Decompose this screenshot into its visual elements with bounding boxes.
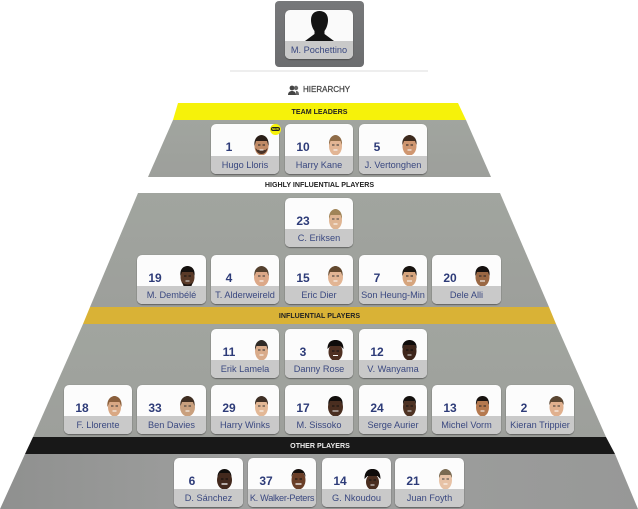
player: Hugo Lloris: Hugo Lloris bbox=[222, 160, 268, 170]
player: Ben Davies: Ben Davies bbox=[148, 420, 195, 430]
player: Danny Rose: Danny Rose bbox=[294, 364, 344, 374]
player: F. Llorente bbox=[64, 385, 132, 434]
player: Juan Foyth: 21 bbox=[406, 474, 420, 488]
player: M. Dembele: 19 bbox=[148, 271, 162, 285]
player: G. Nkoudou: 14 bbox=[333, 474, 347, 488]
player: Dele Alli: 20 bbox=[443, 271, 457, 285]
player: Ben Davies: 33 bbox=[148, 401, 162, 415]
player: Michel Vorm: Michel Vorm bbox=[441, 420, 492, 430]
player: M. Dembele bbox=[137, 255, 206, 304]
player: Serge Aurier: Serge Aurier bbox=[367, 420, 419, 430]
player: K. Walker-Peters bbox=[248, 458, 316, 507]
manager card bbox=[285, 10, 353, 59]
band: other players bbox=[25, 437, 615, 454]
player: V. Wanyama bbox=[359, 329, 427, 378]
player: M. Sissoko: 17 bbox=[296, 401, 310, 415]
player: Kieran Trippier: 2 bbox=[521, 401, 527, 415]
player: D. Sanchez: D. Sánchez bbox=[185, 493, 232, 503]
player: F. Llorente: F. Llorente bbox=[77, 420, 119, 430]
player: Juan Foyth: Juan Foyth bbox=[407, 493, 452, 503]
player: G. Nkoudou bbox=[322, 458, 391, 507]
player: Juan Foyth bbox=[395, 458, 464, 507]
player: Hugo Lloris bbox=[211, 124, 279, 174]
player: Eric Dier bbox=[285, 255, 353, 304]
player: C. Eriksen bbox=[285, 198, 353, 247]
player: Hugo Lloris: 1 bbox=[226, 140, 232, 154]
player: J. Vertonghen: J. Vertonghen bbox=[365, 160, 421, 170]
player: Harry Winks: 29 bbox=[222, 401, 236, 415]
heading: hierarchy bbox=[288, 85, 350, 95]
player: Son Heung-Min bbox=[359, 255, 427, 304]
player: K. Walker-Peters: K. Walker-Peters bbox=[250, 493, 314, 503]
player: C. Eriksen: C. Eriksen bbox=[298, 233, 340, 243]
player: Serge Aurier: 24 bbox=[370, 401, 384, 415]
player: K. Walker-Peters: 37 bbox=[259, 474, 273, 488]
player: Ben Davies bbox=[137, 385, 206, 434]
player: V. Wanyama: V. Wanyama bbox=[367, 364, 419, 374]
heading: team leaders: TEAM LEADERS bbox=[292, 108, 347, 116]
player: G. Nkoudou: G. Nkoudou bbox=[332, 493, 381, 503]
band: influential players bbox=[83, 307, 556, 324]
player: Kieran Trippier bbox=[506, 385, 574, 434]
player: Harry Winks: Harry Winks bbox=[220, 420, 270, 430]
player: Erik Lamela bbox=[211, 329, 279, 378]
manager card: M. Pochettino bbox=[291, 45, 347, 55]
player: Erik Lamela: 11 bbox=[223, 345, 235, 359]
player: Michel Vorm: 13 bbox=[443, 401, 457, 415]
player: J. Vertonghen bbox=[359, 124, 427, 174]
player: Dele Alli: Dele Alli bbox=[450, 290, 483, 300]
player: D. Sanchez bbox=[174, 458, 243, 507]
player: Son Heung-Min: 7 bbox=[374, 271, 380, 285]
icon: people bbox=[288, 86, 299, 95]
heading: other players: OTHER PLAYERS bbox=[290, 442, 350, 450]
player: Harry Winks bbox=[211, 385, 279, 434]
player: Eric Dier: 15 bbox=[296, 271, 310, 285]
band: team leaders bbox=[173, 103, 466, 120]
player: Kieran Trippier: Kieran Trippier bbox=[510, 420, 570, 430]
player: T. Alderweireld: 4 bbox=[226, 271, 232, 285]
player: C. Eriksen: 23 bbox=[296, 214, 310, 228]
player: Dele Alli bbox=[432, 255, 501, 304]
player: M. Sissoko bbox=[285, 385, 353, 434]
player: J. Vertonghen: 5 bbox=[374, 140, 380, 154]
badge: new bbox=[270, 124, 281, 135]
player: Danny Rose: 3 bbox=[300, 345, 306, 359]
badge: new: NEW bbox=[272, 127, 279, 131]
player: Eric Dier: Eric Dier bbox=[301, 290, 337, 300]
player: V. Wanyama: 12 bbox=[370, 345, 384, 359]
player: F. Llorente: 18 bbox=[75, 401, 89, 415]
player: D. Sanchez: 6 bbox=[189, 474, 195, 488]
player: Harry Kane: 10 bbox=[296, 140, 310, 154]
player: Erik Lamela: Erik Lamela bbox=[221, 364, 269, 374]
player: Harry Kane bbox=[285, 124, 353, 174]
player: M. Sissoko: M. Sissoko bbox=[297, 420, 341, 430]
player: M. Dembele: M. Dembélé bbox=[147, 290, 196, 300]
heading: highly influential players: HIGHLY INFLUENTIAL PLAYERS bbox=[265, 181, 374, 189]
player: Danny Rose bbox=[285, 329, 353, 378]
manager panel bbox=[275, 1, 364, 67]
player: Serge Aurier bbox=[359, 385, 427, 434]
player: Michel Vorm bbox=[432, 385, 501, 434]
player: Harry Kane: Harry Kane bbox=[296, 160, 342, 170]
player: Son Heung-Min: Son Heung-Min bbox=[361, 290, 425, 300]
heading: hierarchy: HIERARCHY bbox=[303, 85, 350, 94]
player: T. Alderweireld bbox=[211, 255, 279, 304]
player: T. Alderweireld: T. Alderweireld bbox=[215, 290, 275, 300]
heading: influential players: INFLUENTIAL PLAYERS bbox=[279, 312, 360, 320]
